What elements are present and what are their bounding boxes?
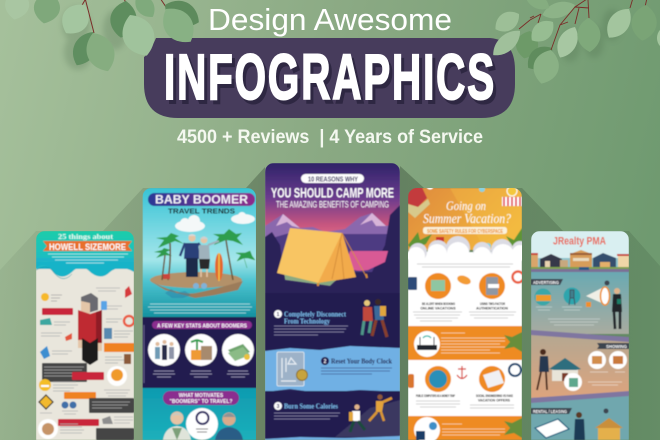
card 2 subtitle: TRAVEL TRENDS (168, 206, 235, 216)
card 5 rental section (531, 391, 629, 440)
card 1 small labels and icons (38, 286, 134, 440)
card 2 key stats panel (142, 317, 256, 388)
card 3 mountains (265, 212, 389, 273)
card 4 white section 2: SOCIAL ENGINEERING VS FAKE (476, 394, 514, 398)
card 1 header (36, 231, 134, 279)
card 3 reason 2 (265, 346, 400, 393)
motivation heading pill: "BOOMERS" TO TRAVEL? (170, 399, 232, 405)
card 4 white section 2: PUBLIC COMPUTERS AS A MONEY TRAP (416, 394, 455, 398)
card 3 reason 2: 2 (324, 359, 327, 365)
card 3 reason 1 (265, 293, 400, 350)
title line: Design Awesome: Design Awesome (208, 2, 452, 37)
long shadows: left staircase (0, 167, 265, 440)
card 3 pink lake (346, 251, 388, 271)
card 4 white section: BE ALERT WHEN BOOKING (422, 302, 455, 306)
card 2: Baby Boomer (142, 188, 256, 440)
card 2 title pill: BABY BOOMER (155, 194, 249, 206)
motivation heading pill (163, 391, 239, 405)
key stats heading pill: A FEW KEY STATS ABOUT BOOMERS (157, 324, 247, 330)
card 3 reason 3: 3 (277, 404, 280, 410)
card 4 white section: USING TWO-FACTOR (480, 302, 505, 306)
card 3: 10 reasons to camp (265, 163, 400, 440)
card 2 intro text lines (148, 304, 252, 313)
card 3 pill heading: 10 REASONS WHY (308, 176, 358, 184)
card 3 reason 1: 1 (277, 312, 280, 318)
card 5 showing section (531, 330, 629, 402)
badge (144, 38, 515, 118)
card 4 header (408, 182, 522, 250)
card 4 white section (407, 236, 528, 326)
card 3 tent (277, 228, 367, 286)
subtitle: reviews and years: 4500 + Reviews | 4 Years of Service (177, 126, 483, 148)
card 5 rental section: RENTAL / LEASING (533, 409, 567, 415)
card 3 reason 3 (265, 391, 400, 438)
card 5: JRealty PMA (531, 231, 629, 440)
card 4: summer vacation (407, 182, 528, 440)
card 5 showing section: SHOWING (606, 344, 627, 350)
card 4 orange band 1 (408, 326, 522, 360)
card 4 orange band 2 (408, 416, 522, 440)
card 2 island scene with couple and palms (150, 229, 255, 298)
card 1 isometric character (78, 293, 102, 365)
hikers (362, 299, 387, 337)
leaves: top right branch (488, 0, 660, 87)
card 2 clouds (175, 212, 255, 232)
card 5 advertising section (531, 272, 629, 334)
card 3 reason 1: Completely Disconnect (284, 310, 347, 318)
card 3 main heading: YOU SHOULD CAMP MORE (271, 184, 394, 200)
card 5 houses (531, 250, 629, 272)
long shadows: right staircase (400, 166, 660, 440)
card 4 pill: SOME SAFETY RULES FOR CYBERSPACE (427, 229, 503, 235)
card 1 heading: 25 things about (58, 233, 114, 241)
card 4 white section: AUTHENTICATION (476, 306, 508, 310)
card 1: Howell Sizemore (36, 231, 134, 440)
card 4 heading line 1: Going on (446, 198, 486, 213)
card 2 motivation section (142, 388, 256, 440)
card 4 white section 2 (408, 360, 522, 416)
climbers (349, 394, 392, 432)
card 3 reason 1: From Technology (284, 318, 330, 326)
motivation heading pill: WHAT MOTIVATES (179, 393, 224, 399)
card 4 heading line 2: Summer Vacation? (423, 211, 511, 226)
card 3 subheading: THE AMAZING BENEFITS OF CAMPING (276, 200, 389, 210)
card 1 orange ribbon: HOWELL SIZEMORE (49, 242, 126, 253)
card 4 white section: ONLINE VACATIONS (420, 306, 456, 310)
card 5 title: JRealty PMA (553, 236, 606, 248)
leaves: top left branch (2, 0, 204, 76)
card 3 dark foreground (265, 205, 400, 440)
card 5 advertising section: ADVERTISING (533, 280, 559, 286)
card 4 white section 2: VACATION OFFERS (478, 398, 511, 402)
card 3 pill heading (301, 174, 364, 184)
card 3 reason 2: Reset Your Body Clock (331, 358, 392, 366)
stat circles (148, 334, 254, 366)
card 3 reason 3: Burn Some Calories (284, 402, 338, 410)
